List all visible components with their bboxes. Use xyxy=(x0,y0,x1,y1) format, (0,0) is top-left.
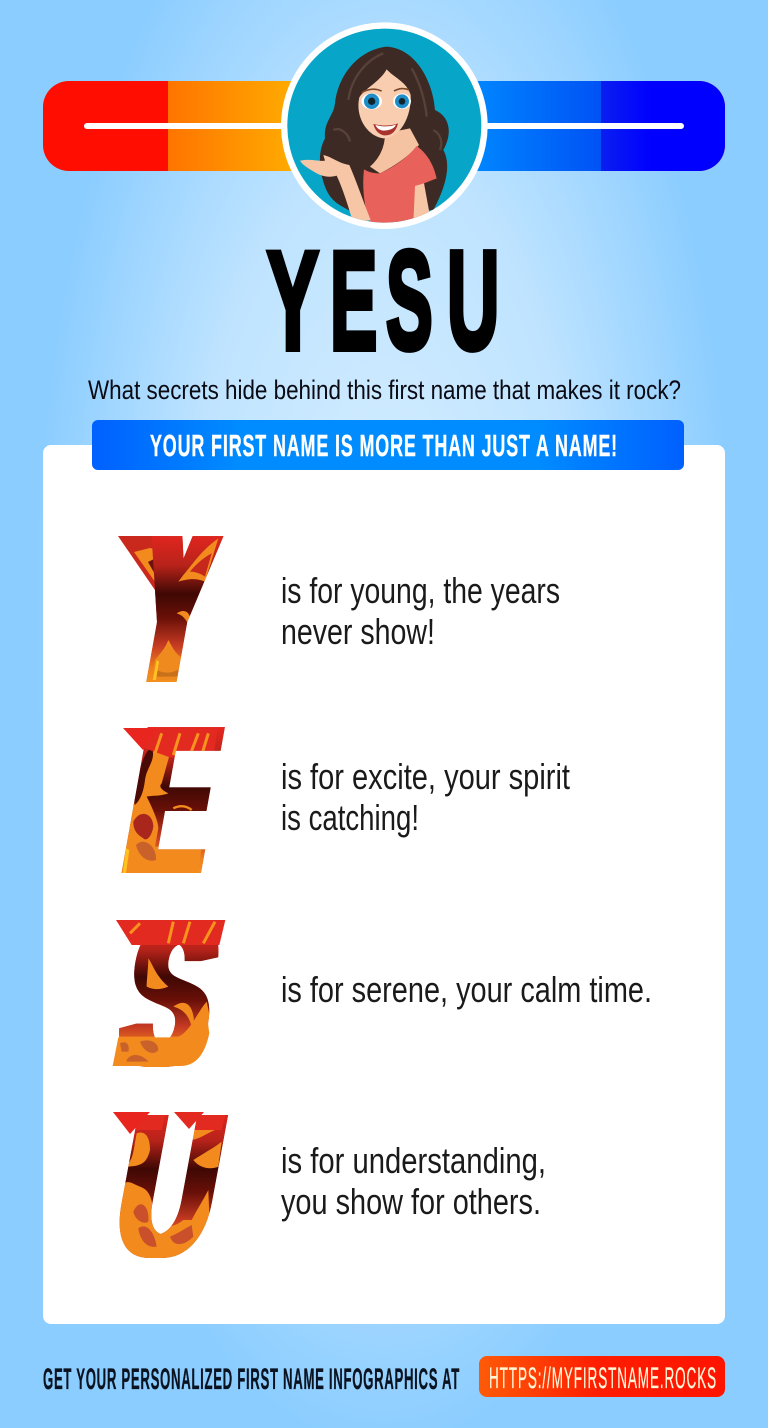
text: Y line xyxy=(281,570,560,652)
neck xyxy=(370,128,419,173)
fire letter S: S xyxy=(109,881,231,1110)
banner xyxy=(92,420,684,470)
fire letter U xyxy=(113,1112,228,1258)
fire letter U: U xyxy=(102,1071,238,1300)
text: E line xyxy=(281,756,570,838)
arm and hand xyxy=(300,155,371,223)
text: Y line: never show! xyxy=(281,611,435,652)
fire letter Y xyxy=(118,536,224,682)
fire letter S xyxy=(112,920,226,1067)
hair xyxy=(320,47,449,215)
avatar portrait xyxy=(281,22,488,229)
face xyxy=(358,69,411,138)
text: U line: you show for others. xyxy=(281,1181,541,1222)
text: S line: is for serene, your calm time. xyxy=(281,969,652,1010)
title: E xyxy=(330,222,377,379)
fire letter E: E xyxy=(114,682,232,919)
title: S xyxy=(386,222,433,378)
white content panel xyxy=(43,445,725,1324)
eyes xyxy=(361,89,411,109)
text: E line: is catching! xyxy=(281,797,419,838)
title: Y xyxy=(267,222,319,379)
text: U line xyxy=(281,1140,546,1222)
title: U xyxy=(447,222,499,378)
text: Y line: is for young, the years xyxy=(281,570,560,611)
left arm xyxy=(118,536,190,612)
header colour bar xyxy=(43,81,725,171)
fire letter E xyxy=(122,727,225,873)
fire letter Y: Y xyxy=(125,490,224,727)
text: E line: is for excite, your spirit xyxy=(281,756,570,797)
bottom band xyxy=(113,1013,209,1066)
smile xyxy=(373,123,398,135)
shirt xyxy=(363,146,437,223)
top band xyxy=(116,920,225,945)
footer url button xyxy=(479,1356,725,1397)
text: U line: is for understanding, xyxy=(281,1140,546,1181)
title xyxy=(267,222,499,379)
hair highlights xyxy=(333,53,441,150)
